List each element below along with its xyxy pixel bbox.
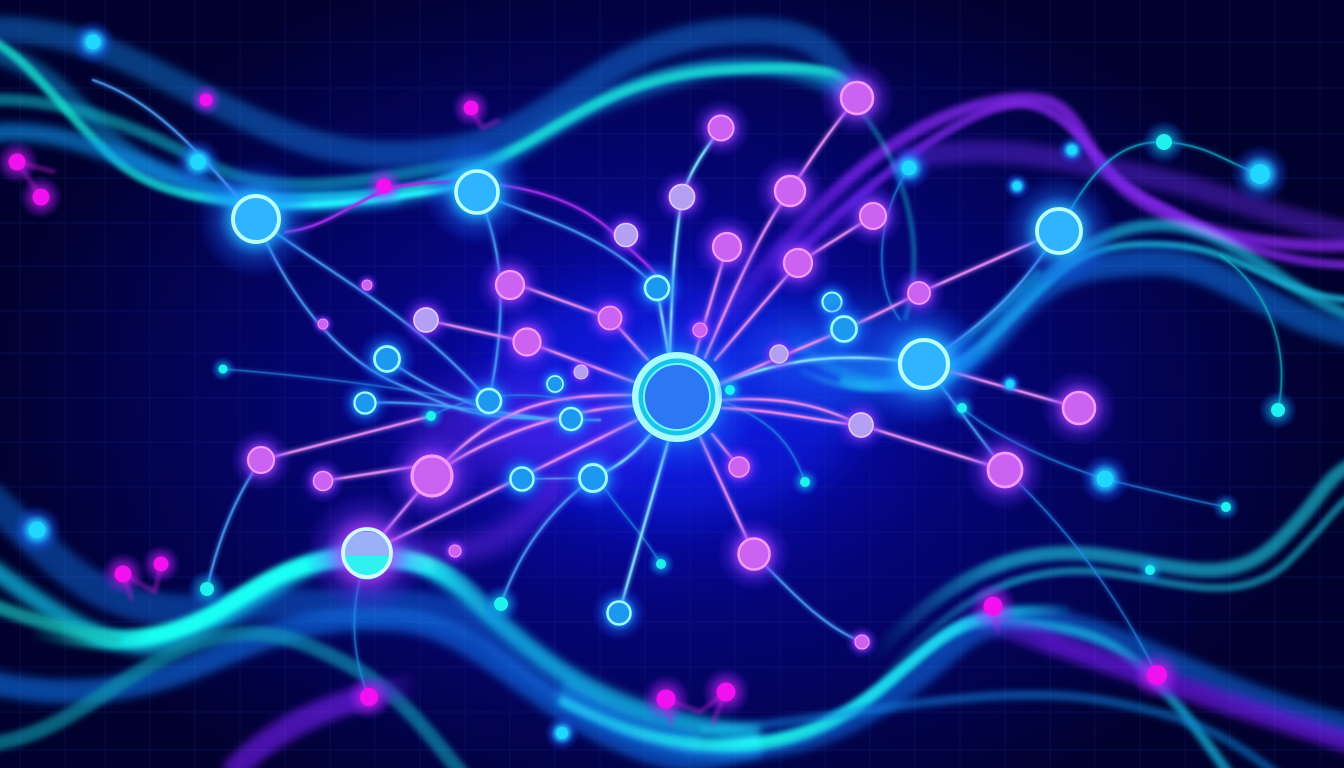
ribbon: right teal band — [780, 225, 1344, 388]
faint background links — [223, 142, 1281, 697]
central hub node — [592, 312, 762, 482]
purple nodes — [230, 60, 1117, 659]
cyan links from hub — [522, 128, 924, 613]
blue links — [93, 80, 1059, 642]
ribbon: bottom left bright cyan wave — [0, 490, 760, 768]
magenta dots — [0, 83, 1183, 724]
pale lilac nodes — [400, 170, 887, 451]
small teal dots — [187, 120, 1298, 624]
cyan ring nodes — [340, 259, 874, 641]
ribbon: bottom right wave — [560, 460, 1344, 768]
ribbon: top left to top centre — [0, 30, 914, 320]
purple links from hub — [261, 98, 1079, 554]
large cyan nodes — [196, 137, 1116, 615]
hub ambient glow — [400, 280, 960, 552]
small magenta stems — [17, 108, 998, 725]
ribbon: right purple band — [700, 98, 1344, 330]
